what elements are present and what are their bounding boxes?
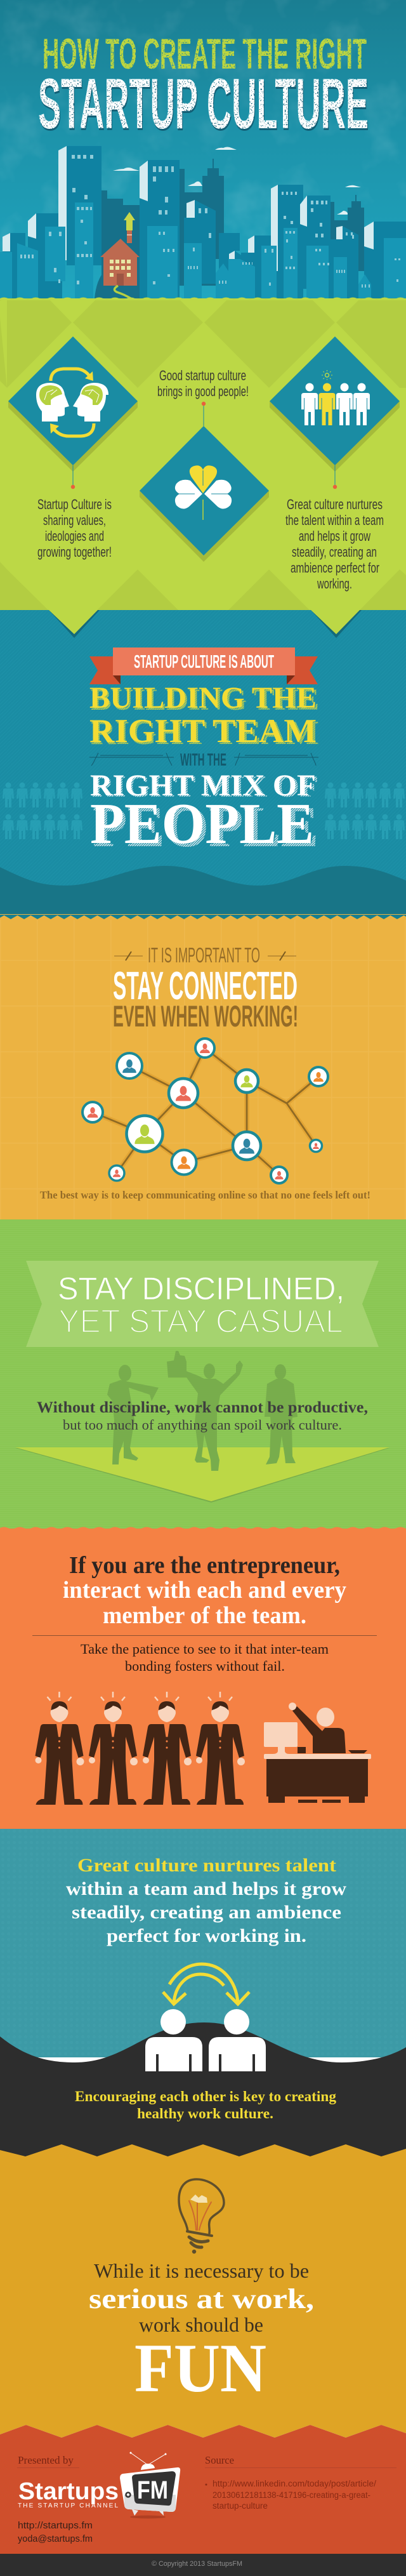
panel: stay connected <box>0 914 406 1219</box>
text: within a team: steadily, creating an ambience <box>72 1902 341 1923</box>
dark wave <box>0 2022 406 2158</box>
panel: entrepreneur <box>0 1526 406 1829</box>
caption: The best way is to keep communicating online so that no one feels left out! <box>40 1189 370 1201</box>
panel: fun <box>0 2144 406 2438</box>
text: within a team: within a team and helps it grow <box>66 1878 346 1899</box>
arrow <box>15 1447 390 1503</box>
wavy hero edge <box>0 296 406 300</box>
heading: stay disciplined: STAY DISCIPLINED, <box>58 1271 344 1306</box>
text: take the patience: bonding fosters without fail. <box>125 1658 285 1674</box>
presented by heading: Presented by <box>18 2454 74 2466</box>
hero sky background <box>0 0 406 298</box>
orange background <box>0 1529 406 1829</box>
heading: building the: BUILDING THE <box>91 683 319 717</box>
panel: right team <box>0 610 406 919</box>
text: work should be: work should be <box>139 2313 263 2336</box>
text: within a team <box>66 1878 346 1946</box>
text: while it is necessary: While it is necessary to be <box>94 2259 309 2282</box>
diamond shadows <box>8 401 400 562</box>
clouds <box>113 147 361 215</box>
yellow grid background <box>0 920 406 1219</box>
city white sides <box>3 146 374 271</box>
city mid layer <box>3 146 406 298</box>
source link: 20130612181138-417196-creating-a-great- <box>213 2490 370 2500</box>
text: great culture nurtures: working. <box>317 576 352 592</box>
ribbon <box>89 647 318 684</box>
wavy edge <box>0 1526 406 1530</box>
text: take the patience: Take the patience to see to it that inter-team <box>81 1641 329 1657</box>
teal background <box>0 610 406 919</box>
city back layer <box>95 159 364 298</box>
heading: right team: RIGHT TEAM <box>91 715 319 752</box>
text: encouraging each other: healthy work culture. <box>137 2106 273 2121</box>
dark bar <box>0 2554 406 2576</box>
diamond: sharing values <box>8 336 138 465</box>
text: good startup culture: brings in good people! <box>157 383 249 399</box>
with the divider <box>89 750 318 769</box>
logo: startups.fm: THE STARTUP CHANNEL <box>18 2502 118 2509</box>
heading: people: PEOPLE <box>90 792 314 856</box>
building windows <box>20 155 400 288</box>
panel: nurture talent <box>0 1829 406 2158</box>
dark wave <box>0 866 406 919</box>
text: startup culture is sharing: Startup Culture is <box>37 496 112 512</box>
text: encouraging each other <box>75 2088 337 2121</box>
contact links: yoda@startups.fm <box>18 2534 93 2544</box>
text: startup culture is sharing: sharing values, <box>43 512 106 528</box>
text: serious at work: serious at work, <box>89 2283 314 2314</box>
ribbon: STARTUP CULTURE IS ABOUT <box>134 652 274 672</box>
diamond: clover <box>140 426 269 555</box>
sky mottling texture <box>0 0 406 254</box>
green background <box>0 298 406 610</box>
text: without discipline: Without discipline, work cannot be productive, <box>37 1399 368 1416</box>
logo: startups.fm <box>18 2452 180 2519</box>
icon: two heads with arrows <box>36 369 108 436</box>
text: take the patience <box>81 1641 329 1674</box>
green notches <box>49 610 362 638</box>
panel: footer credits <box>0 2425 406 2554</box>
icon: exchange arrows <box>163 1964 249 2004</box>
teal background <box>0 1829 406 2057</box>
panel: hero <box>0 0 406 298</box>
heading: if you are the entrepreneur: If you are the entrepreneur, <box>69 1552 340 1579</box>
icon: light bulb <box>179 2179 224 2254</box>
red background <box>0 2425 406 2554</box>
text: good startup culture <box>157 368 249 399</box>
businessmen silhouettes <box>107 1351 298 1471</box>
heading: right team: RIGHT TEAM <box>89 713 317 750</box>
heading: right mix of: RIGHT MIX OF <box>90 769 316 802</box>
heading: great culture nurtures talent: Great culture nurtures talent <box>77 1855 336 1876</box>
heading: interact with each and every member: member of the team. <box>103 1602 306 1629</box>
text: too much of anything: but too much of anything can spoil work culture. <box>63 1417 342 1433</box>
source heading: Source <box>205 2454 234 2466</box>
background diamonds <box>0 298 406 610</box>
heading: yet stay casual: YET STAY CASUAL <box>58 1303 343 1340</box>
logo: startups.fm: FM <box>137 2476 168 2504</box>
icon: team of four <box>301 370 370 425</box>
heading: building the: BUILDING THE <box>89 681 317 715</box>
heading: interact with each and every member: interact with each and every <box>63 1577 346 1603</box>
icon: two people <box>145 2009 266 2071</box>
text: good startup culture: Good startup culture <box>159 368 246 383</box>
text: startup culture is sharing: ideologies and <box>45 528 104 544</box>
text: great culture nurtures: and helps it grow <box>299 528 370 544</box>
with the divider: WITH THE <box>180 750 226 769</box>
source link <box>206 2479 376 2511</box>
icon: house with rising arrow <box>100 212 140 298</box>
contact links: http://startups.fm <box>18 2521 93 2531</box>
icon: clover <box>175 465 232 520</box>
city front layer <box>0 202 406 298</box>
network diagram <box>82 1039 328 1183</box>
team members standing <box>36 1692 245 1805</box>
people silhouettes <box>3 782 405 839</box>
text: startup culture is sharing: growing together! <box>37 544 112 560</box>
zigzag edge <box>0 914 406 920</box>
text: encouraging each other: Encouraging each other is key to creating <box>75 2088 337 2104</box>
banner <box>26 1261 379 1347</box>
diamond: talent team <box>270 336 400 465</box>
heading: people: PEOPLE <box>93 795 318 859</box>
heading: it is important to: IT IS IMPORTANT TO <box>148 943 260 967</box>
connector lines <box>71 402 337 489</box>
panel: copyright bar <box>0 2554 406 2576</box>
heading: right mix of: RIGHT MIX OF <box>91 770 318 804</box>
text: within a team: perfect for working in. <box>107 1925 306 1946</box>
text: great culture nurtures <box>285 496 384 592</box>
source link: startup-culture <box>213 2501 268 2511</box>
heading: fun: FUN <box>134 2330 266 2407</box>
entrepreneur at desk <box>264 1703 371 1803</box>
heading: it is important to <box>114 943 296 967</box>
logo: startups.fm: Startups <box>18 2478 119 2505</box>
panel: stay disciplined <box>0 1219 406 1530</box>
gold background with zigzag edges <box>0 2144 406 2438</box>
heading: interact with each and every member <box>63 1577 346 1629</box>
source link: http://www.linkedin.com/today/post/article/ <box>213 2479 376 2488</box>
contact links <box>18 2521 93 2544</box>
green background <box>0 1219 406 1530</box>
text: startup culture is sharing <box>37 496 112 560</box>
copyright text: © Copyright 2013 StartupsFM <box>152 2560 242 2568</box>
panel: green values <box>0 296 406 610</box>
